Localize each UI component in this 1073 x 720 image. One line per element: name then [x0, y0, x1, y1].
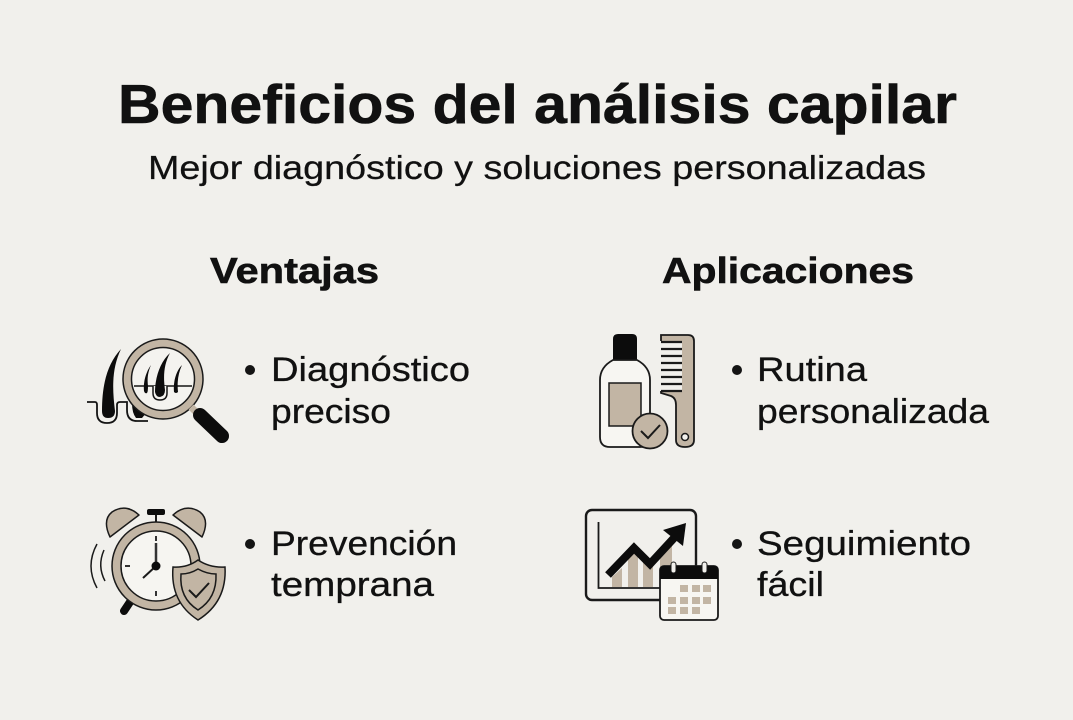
- text: Rutina personalizada: personalizada: [757, 393, 989, 431]
- heading: Ventajas: Ventajas: [210, 250, 379, 291]
- text: Diagnóstico preciso: Diagnóstico: [271, 351, 470, 389]
- text: Seguimiento fácil: Seguimiento: [757, 525, 971, 563]
- icon: hair follicle under magnifying glass: [87, 339, 222, 436]
- heading: Aplicaciones: Aplicaciones: [662, 250, 914, 291]
- text: Rutina personalizada: Rutina: [757, 351, 867, 389]
- text: Prevención temprana: Prevención: [271, 525, 457, 563]
- text: Diagnóstico preciso: preciso: [271, 393, 391, 431]
- text: Prevención temprana: [245, 525, 457, 604]
- text: Rutina personalizada: [732, 351, 989, 431]
- text: Seguimiento fácil: [732, 525, 971, 604]
- icon: growth chart with calendar: [586, 510, 718, 620]
- text: Diagnóstico preciso: [245, 351, 470, 431]
- subtitle: Mejor diagnóstico y soluciones personalizadas: [148, 149, 926, 186]
- text: Prevención temprana: temprana: [271, 566, 434, 604]
- text: Seguimiento fácil: fácil: [757, 566, 824, 604]
- title: Beneficios del análisis capilar: [118, 73, 957, 135]
- icon: alarm clock with shield: [91, 508, 225, 620]
- icon: bottle and comb: [600, 334, 694, 448]
